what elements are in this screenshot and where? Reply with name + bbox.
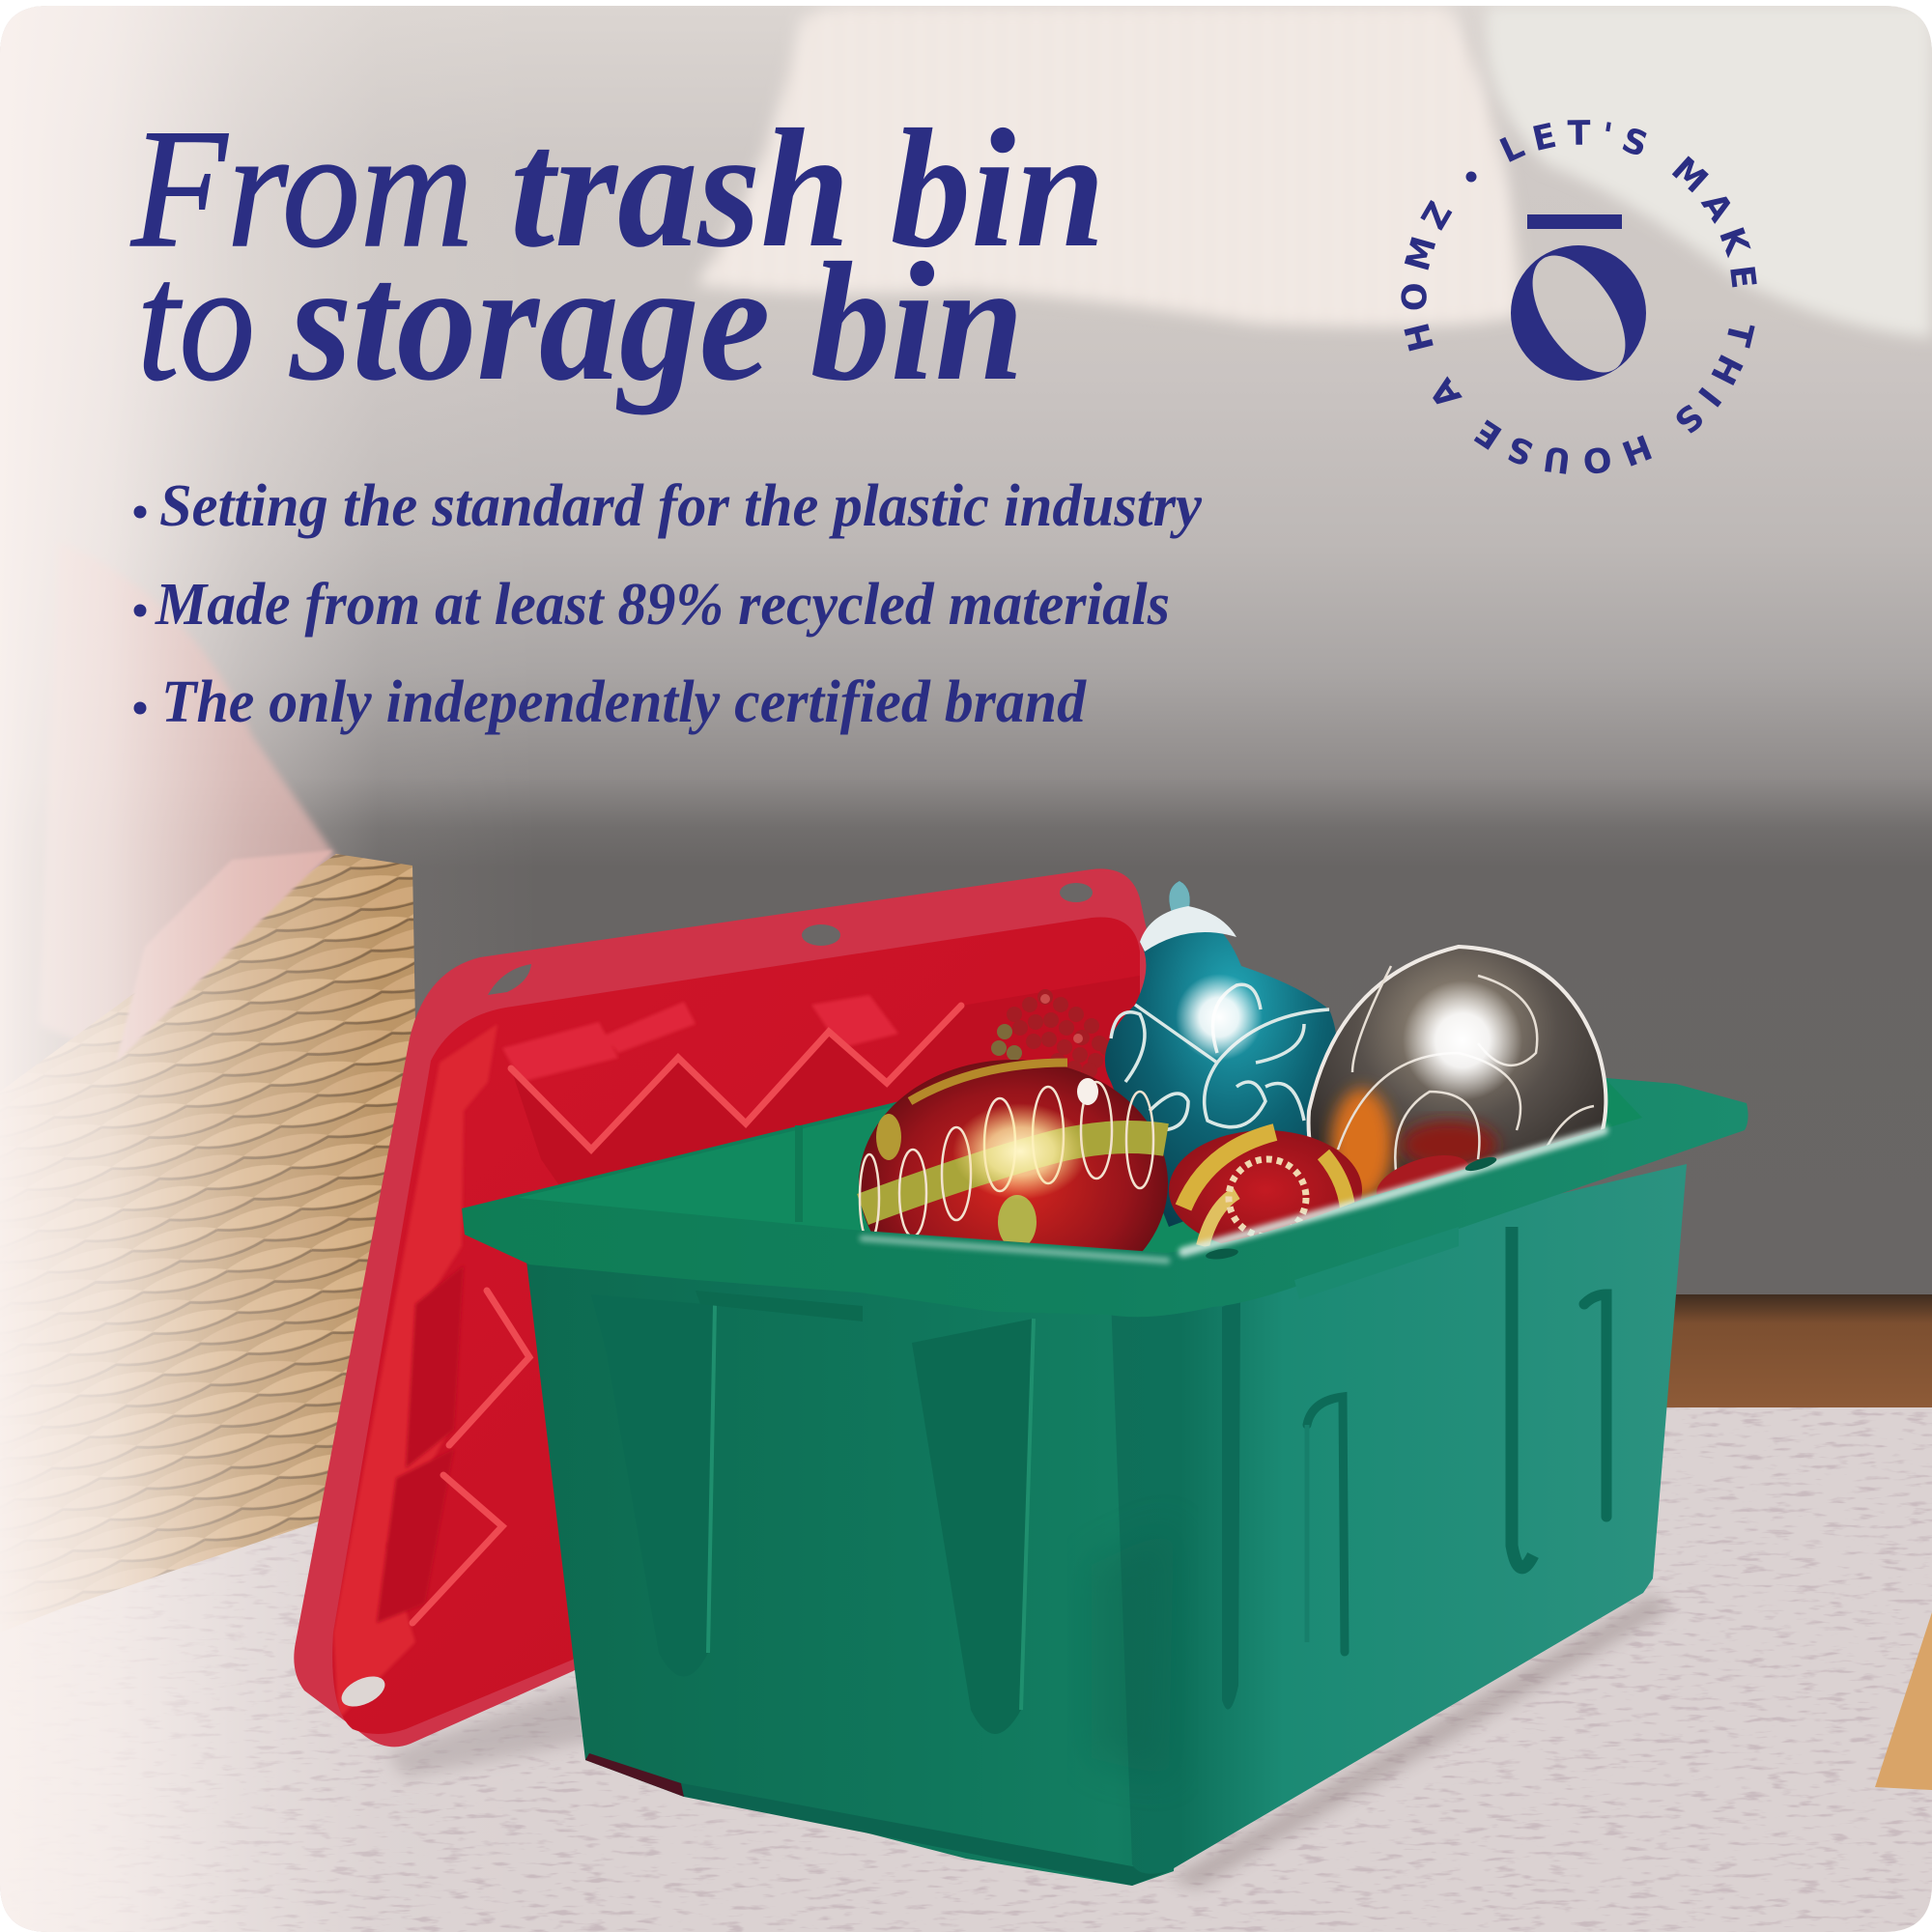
- rim lower lip tabs: [696, 1291, 863, 1321]
- zigzag ridge band: [511, 976, 1140, 1352]
- tapered ribs, left face: [591, 1294, 715, 1677]
- teal ornament: [1105, 881, 1337, 1227]
- headline: trash bin: [510, 95, 1105, 283]
- headline: storage bin: [289, 228, 1024, 416]
- stepped left column: [333, 1024, 497, 1719]
- bullet 2: Made from at least 89% recycled materials: [155, 572, 1170, 638]
- lid shadow on carpet: [386, 1686, 599, 1777]
- wicker basket: [0, 854, 415, 1633]
- ornaments: [859, 881, 1605, 1307]
- slogan dot: [1466, 172, 1476, 182]
- logo ring: [1511, 245, 1646, 381]
- bin dark base: [585, 1760, 1169, 1886]
- bullet 1: Setting the standard for the plastic industry: [159, 473, 1202, 539]
- green storage bin: [462, 1078, 1748, 1889]
- circular slogan: LET'S MAKE THIS HOUSE A HOMZ: [1401, 120, 1757, 474]
- bin shadow on carpet: [1169, 1594, 1671, 1889]
- cushion, striped: [696, 6, 1521, 327]
- red lid: [294, 868, 1154, 1747]
- sofa and wall: [0, 6, 1932, 1300]
- logo bar: [1527, 214, 1622, 229]
- bullet 3: The only independently certified brand: [161, 669, 1087, 735]
- bin interior back wall: [518, 1080, 1642, 1253]
- logo badge: [1401, 120, 1757, 474]
- bullet list: [133, 473, 1202, 735]
- small red and gold ball: [1169, 1130, 1362, 1250]
- wooden furniture leg: [1875, 1612, 1932, 1790]
- lid rim: [294, 868, 1154, 1747]
- berry cluster: [991, 989, 1115, 1078]
- bin left face: [526, 1261, 1217, 1886]
- ribs, right face: [1222, 1299, 1240, 1710]
- bin right face: [1111, 1164, 1687, 1874]
- lid inner panel: [332, 917, 1140, 1734]
- cloth flap over basket: [116, 850, 333, 1063]
- lid holes: [488, 964, 531, 995]
- headline: From: [130, 95, 473, 283]
- carpet texture: [0, 1407, 1932, 1932]
- lid relief: [333, 976, 1140, 1719]
- silver ball: [1309, 947, 1605, 1217]
- rim highlights: [863, 1130, 1604, 1261]
- wooden floor: [1666, 1294, 1932, 1407]
- red ball: [859, 1060, 1168, 1307]
- left fade overlay: [0, 0, 541, 1932]
- rim: [462, 1078, 1748, 1317]
- white throw blanket: [1487, 6, 1932, 338]
- corner shadow: [1092, 1526, 1174, 1777]
- carpet: [0, 1407, 1932, 1932]
- headline: to: [137, 228, 255, 416]
- rim holes: [1205, 1247, 1239, 1261]
- pink cloth in basket: [46, 597, 338, 1037]
- raised top blocks: [502, 995, 898, 1082]
- headline: [130, 95, 1105, 416]
